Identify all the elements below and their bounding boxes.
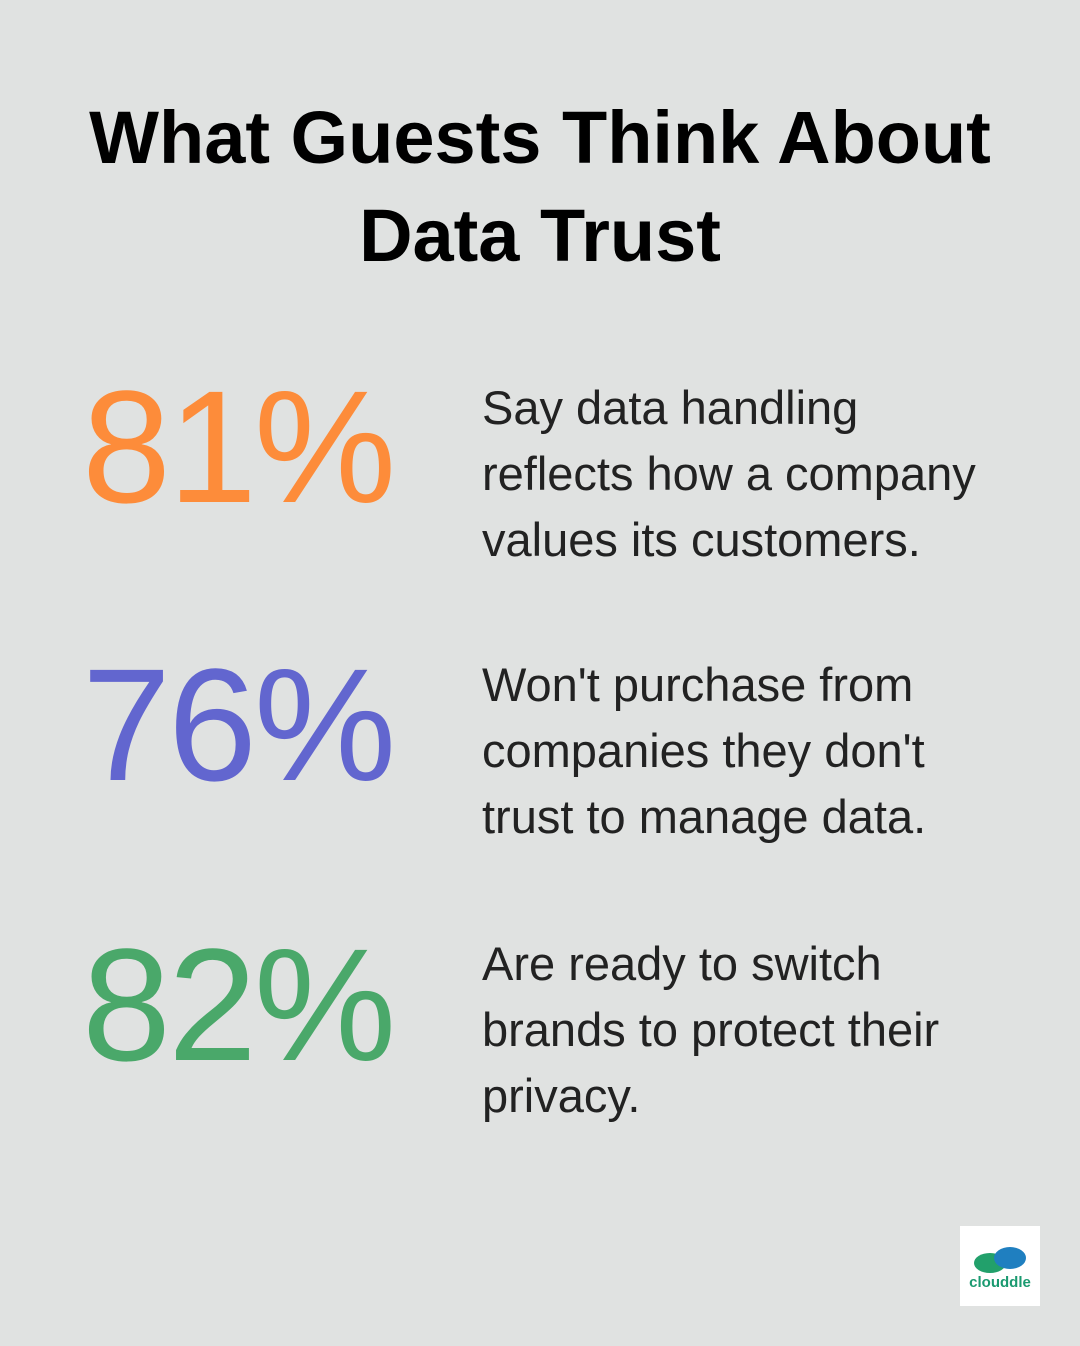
title <box>89 96 991 277</box>
stat 2 number: 76% <box>82 635 393 814</box>
logo: clouddle <box>969 1274 1031 1291</box>
stat 2 text: trust to manage data. <box>482 790 926 843</box>
stat 1 text <box>482 381 976 566</box>
stat 3 number: 82% <box>82 915 393 1094</box>
stat 1 text: values its customers. <box>482 513 921 566</box>
stat 2 text: companies they don't <box>482 724 925 777</box>
stat 2 text <box>482 658 926 843</box>
stat 1 text: Say data handling <box>482 381 858 434</box>
stat 3 text: Are ready to switch <box>482 937 882 990</box>
stat 3 text: privacy. <box>482 1069 640 1122</box>
stat 3 text: brands to protect their <box>482 1003 939 1056</box>
stat 1 number: 81% <box>82 357 393 536</box>
stat 2 text: Won't purchase from <box>482 658 913 711</box>
stat 1 text: reflects how a company <box>482 447 976 500</box>
title: Data Trust <box>359 194 721 277</box>
stat 3 text <box>482 937 939 1122</box>
title: What Guests Think About <box>89 96 991 179</box>
logo <box>960 1226 1040 1306</box>
